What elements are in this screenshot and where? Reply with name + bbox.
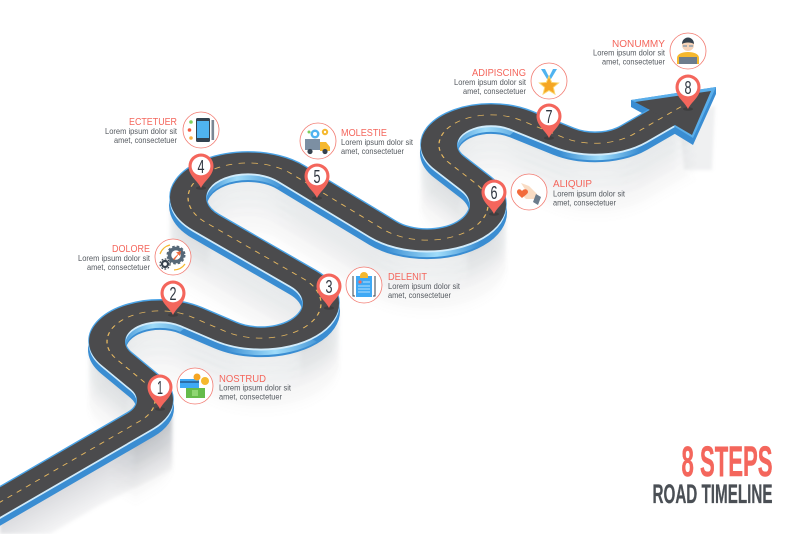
pin 5: [304, 164, 330, 200]
road drop shadow: [0, 105, 715, 534]
icon: smartphone: [183, 112, 219, 148]
text: step 2: [78, 243, 151, 272]
pin 1: [148, 374, 172, 411]
pin 6: [482, 180, 506, 216]
text: step 1: Lorem ipsum dolor sit: [219, 384, 292, 392]
icon: gears: [155, 239, 191, 275]
road blue side wall: [0, 114, 683, 522]
text: step 2: DOLORE: [112, 243, 150, 255]
pin 3: [316, 274, 342, 310]
text: step 7: ADIPISCING: [472, 67, 526, 79]
pin 4: [188, 154, 214, 190]
text: step 4: ECTETUER: [129, 116, 177, 128]
text: step 6: Lorem ipsum dolor sit: [553, 190, 626, 198]
text: step 6: amet, consectetuer: [553, 198, 616, 208]
text: step 5: MOLESTIE: [341, 127, 387, 139]
arrowhead rim: [631, 87, 716, 138]
pin 1: 1: [157, 378, 163, 398]
pin 6: 6: [490, 183, 498, 203]
icon: credit card and cash: [177, 368, 213, 404]
icon: delivery truck: [300, 123, 336, 159]
pin 5: 5: [314, 167, 320, 187]
text: step 1: amet, consectetuer: [219, 392, 282, 402]
text: step 3: [388, 271, 461, 300]
text: step 2: amet, consectetuer: [87, 263, 150, 272]
text: step 8: NONUMMY: [612, 38, 665, 50]
pin 4: 4: [198, 157, 204, 177]
arrowhead blue side: [631, 87, 716, 145]
text: step 8: Lorem ipsum dolor sit: [593, 48, 666, 58]
pin 8: [676, 74, 700, 111]
pin 2: [160, 280, 186, 317]
asphalt surface: [0, 106, 683, 514]
icon: hand with heart: [511, 174, 547, 210]
light highlights on curve undersides: [107, 121, 634, 365]
text: step 7: Lorem ipsum dolor sit: [454, 78, 527, 87]
text: step 6: ALIQUIP: [553, 178, 592, 190]
text: step 5: Lorem ipsum dolor sit: [341, 138, 414, 147]
text: step 8: [593, 38, 666, 66]
yellow centre dashes: [0, 106, 683, 514]
text: step 1: NOSTRUD: [219, 373, 266, 385]
text: step 1: [219, 373, 292, 402]
pin 2: 2: [170, 284, 176, 304]
text: step 5: amet, consectetuer: [341, 147, 404, 156]
blue upper rim: [0, 103, 650, 488]
icon: person with laptop: [670, 33, 706, 69]
text: step 5: [341, 127, 414, 156]
text: step 3: DELENIT: [388, 271, 428, 283]
pin 7: 7: [546, 107, 552, 127]
text: step 2: Lorem ipsum dolor sit: [78, 254, 151, 263]
text: step 6: [553, 178, 626, 208]
text: step 7: [454, 67, 527, 96]
pale lower rim: [0, 107, 683, 515]
icon: clipboard: [346, 267, 382, 303]
road: winding asphalt with blue edge: [0, 87, 716, 522]
text: step 7: amet, consectetuer: [463, 87, 526, 96]
text: step 3: amet, consectetuer: [388, 291, 451, 300]
pin 7: [536, 104, 562, 140]
pin 8: 8: [684, 78, 692, 98]
text: step 4: [105, 116, 178, 145]
text: step 4: Lorem ipsum dolor sit: [105, 127, 178, 136]
icon: star medal: [531, 63, 567, 99]
text: step 4: amet, consectetuer: [114, 136, 177, 145]
text: step 3: Lorem ipsum dolor sit: [388, 282, 461, 291]
text: step 8: amet, consectetuer: [602, 58, 665, 66]
arrowhead asphalt: [635, 91, 711, 135]
pin 3: 3: [326, 277, 332, 297]
